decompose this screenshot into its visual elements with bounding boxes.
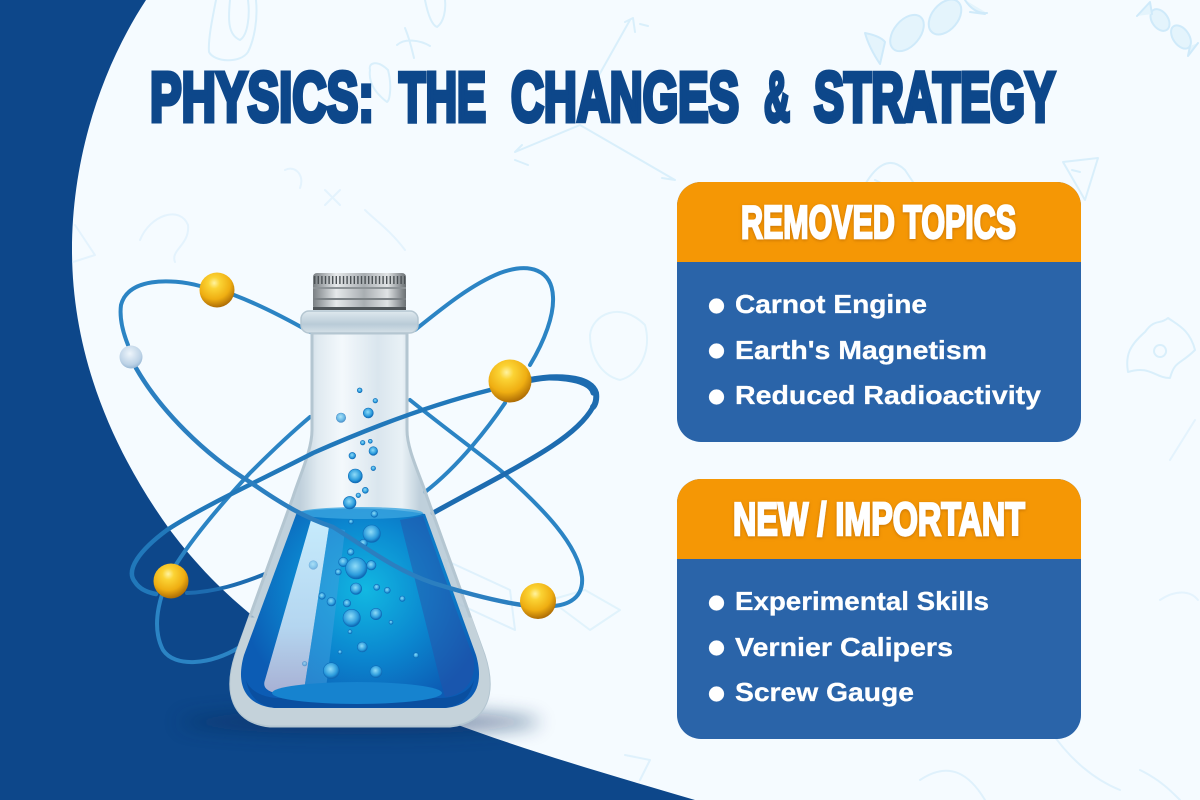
orbits in front of flask: [132, 368, 596, 605]
title: THE: [399, 58, 486, 136]
bullet list: Carnot Engine: [735, 289, 927, 319]
liquid surface: [299, 507, 423, 519]
panel body: [677, 182, 1081, 442]
flask base glass rim: [233, 620, 487, 723]
bullet list: Earth's Magnetism: [735, 335, 987, 365]
liquid secondary highlight: [303, 527, 345, 697]
header text: REMOVED TOPICS: [741, 196, 1016, 248]
panel: new / important: [677, 479, 1081, 739]
title: STRATEGY: [814, 58, 1055, 136]
dark blue curved shape: [0, 0, 695, 800]
liquid floor: [272, 682, 442, 704]
title: &: [764, 58, 790, 136]
flask glass body: [231, 333, 489, 726]
orbits behind flask: [121, 268, 593, 662]
bullet list: [709, 586, 989, 707]
header text: NEW / IMPORTANT: [733, 493, 1025, 545]
panel header: [677, 479, 1081, 559]
liquid right shade: [400, 516, 474, 697]
liquid: [241, 508, 479, 708]
flask rim: [301, 311, 418, 333]
floor shadow: [180, 710, 540, 734]
title: PHYSICS:: [150, 58, 374, 136]
bubbles: [302, 388, 419, 679]
atoms: [120, 272, 556, 619]
bullet list: Screw Gauge: [735, 677, 914, 707]
panel: removed topics: [677, 182, 1081, 442]
illustration: flask with orbits: [120, 268, 596, 734]
bullet list: Vernier Calipers: [735, 632, 953, 662]
title: CHANGES: [511, 58, 739, 136]
bullet list: [709, 289, 1042, 410]
liquid bottom shading: [246, 680, 474, 708]
liquid left highlight: [264, 520, 329, 697]
panel header: [677, 182, 1081, 262]
panel body: [677, 479, 1081, 739]
bullet list: Reduced Radioactivity: [735, 380, 1042, 410]
bottle cap: [313, 273, 406, 310]
bullet list: Experimental Skills: [735, 586, 989, 616]
